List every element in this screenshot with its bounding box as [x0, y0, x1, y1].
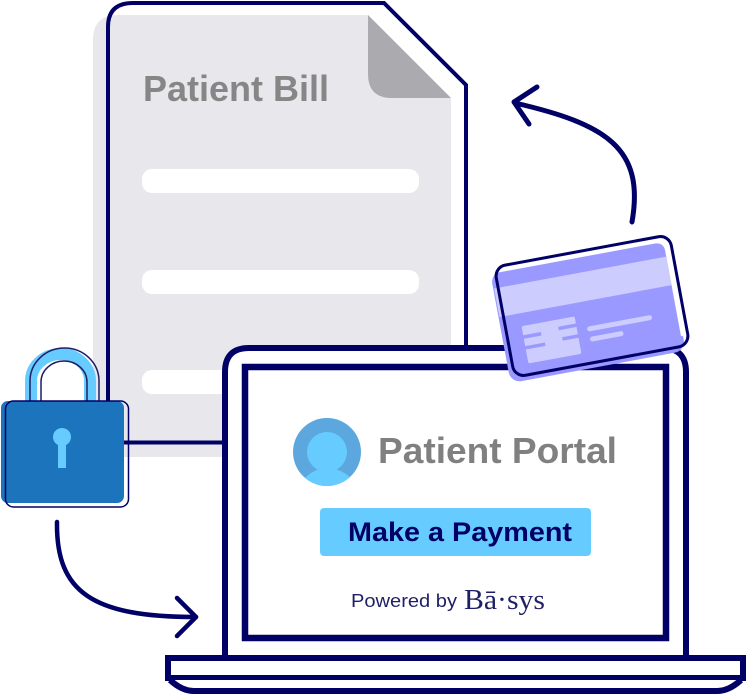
shackle: [31, 354, 90, 402]
card outline: [494, 235, 690, 377]
arrow to laptop: [57, 522, 196, 636]
arrow shaft: [57, 522, 196, 617]
document grey sheet: [93, 15, 451, 457]
avatar head: [307, 432, 347, 472]
basys logo: Bā·sys: [464, 584, 545, 616]
lock body: [1, 401, 124, 503]
arrow head: [177, 598, 196, 636]
document outline: [108, 3, 466, 443]
laptop lid: [225, 348, 686, 660]
card white inner band: [496, 236, 687, 367]
button label: Make a Payment: [348, 517, 572, 547]
powered by label: Powered by: [351, 591, 457, 611]
shackle outline: [30, 348, 99, 401]
document bottom edge: [120, 440, 224, 444]
button background: [320, 508, 591, 556]
make a payment button: [320, 508, 591, 556]
patient bill document: [93, 3, 466, 457]
laptop: [168, 348, 743, 691]
credit card: [489, 235, 691, 383]
card shadow fill: [490, 241, 686, 383]
card text line 1: [587, 315, 653, 332]
avatar background: [293, 418, 361, 486]
card text line 2: [590, 331, 624, 342]
keyhole: [53, 428, 71, 468]
laptop base: [168, 658, 743, 678]
card chip slots: [521, 325, 581, 348]
user avatar icon: [293, 418, 361, 486]
laptop base underside: [170, 680, 741, 691]
card stripe: [494, 257, 672, 317]
arrow to document: [514, 87, 634, 222]
padlock icon: [1, 348, 128, 507]
lock outline: [6, 401, 128, 507]
bill line 2: [142, 270, 419, 294]
card chip: [521, 316, 582, 364]
avatar shoulders: [305, 468, 350, 486]
arrow head: [514, 87, 537, 124]
arrow shaft: [515, 103, 634, 222]
laptop screen: [245, 367, 666, 638]
folded corner: [368, 15, 451, 98]
document title: Patient Bill: [143, 68, 329, 109]
bill line 1: [142, 169, 419, 193]
portal heading: Patient Portal: [378, 430, 617, 471]
bill line 3: [142, 370, 419, 394]
